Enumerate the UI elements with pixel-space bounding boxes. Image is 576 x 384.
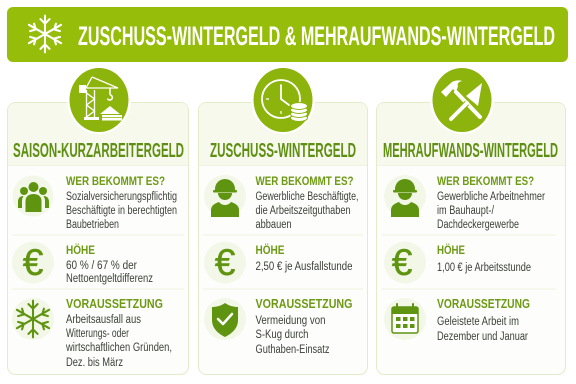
- row: wer bekommt es: WER BEKOMMT ES?: [437, 176, 534, 188]
- row: höhe: HÖHE: [256, 244, 285, 257]
- panel: Mehraufwands-Wintergeld: [376, 66, 566, 374]
- row: wer bekommt es: [384, 175, 545, 231]
- row: wer bekommt es: WER BEKOMMT ES?: [256, 176, 354, 188]
- row: höhe: HÖHE: [437, 244, 465, 257]
- row: wer bekommt es: Dachdeckergewerbe: [437, 219, 519, 231]
- row: voraussetzung: Arbeitsausfall aus: [66, 314, 141, 326]
- row: voraussetzung: [204, 297, 352, 356]
- row: höhe: 60 % / 67 % der: [66, 260, 137, 272]
- row: höhe: [384, 242, 531, 284]
- heading: SAISON-KURZARBEITERGELD: [13, 139, 184, 162]
- row: wer bekommt es: [12, 176, 177, 231]
- row: wer bekommt es: abbauen: [256, 219, 292, 231]
- row: höhe: Nettoentgeltdifferenz: [66, 273, 153, 285]
- icon: euro: [23, 242, 44, 283]
- row: wer bekommt es: Sozialversicherungspflichtig: [66, 191, 177, 203]
- row: höhe: [204, 242, 352, 284]
- row: wer bekommt es: Gewerbliche Arbeitnehmer: [437, 191, 545, 203]
- row: höhe: [12, 242, 153, 285]
- icon: worker: [391, 179, 419, 217]
- row: voraussetzung: wirtschaftlichen Gründen,: [65, 342, 172, 354]
- row: voraussetzung: Geleistete Arbeit im: [437, 316, 519, 328]
- row: voraussetzung: VORAUSSETZUNG: [256, 297, 352, 311]
- row: voraussetzung: Guthaben-Einsatz: [256, 344, 330, 356]
- icon: hammer and trowel: [430, 66, 494, 134]
- row: voraussetzung: Vermeidung von: [256, 315, 326, 327]
- icon: clock and coins: [251, 66, 315, 134]
- icon: snowflake: [17, 301, 49, 337]
- row: wer bekommt es: [204, 175, 358, 231]
- row: wer bekommt es: die Arbeitszeitguthaben: [256, 205, 350, 217]
- icon: shield: [212, 303, 238, 337]
- icon: calendar: [392, 304, 418, 333]
- icon: euro: [392, 242, 413, 283]
- row: voraussetzung: S-Kug durch: [256, 329, 308, 341]
- row: wer bekommt es: im Bauhaupt-/: [437, 205, 495, 217]
- icon: people: [12, 176, 54, 216]
- row: voraussetzung: Dez. bis März: [66, 357, 123, 369]
- row: höhe: 1,00 € je Arbeitsstunde: [437, 262, 531, 274]
- title banner: [7, 7, 568, 62]
- icon: euro: [215, 242, 236, 283]
- row: wer bekommt es: Baubetrieben: [66, 219, 119, 231]
- icon: worker: [211, 179, 239, 217]
- heading: ZUSCHUSS-WINTERGELD: [210, 139, 356, 162]
- row: voraussetzung: [12, 297, 172, 369]
- row: wer bekommt es: Beschäftigte in berechtigten: [66, 205, 177, 217]
- row: voraussetzung: VORAUSSETZUNG: [66, 297, 163, 311]
- row: voraussetzung: Witterungs- oder: [66, 328, 129, 340]
- row: voraussetzung: Dezember und Januar: [437, 331, 528, 343]
- panel: Zuschuss-Wintergeld: [198, 66, 368, 374]
- row: wer bekommt es: WER BEKOMMT ES?: [66, 176, 165, 188]
- row: voraussetzung: VORAUSSETZUNG: [437, 297, 530, 311]
- row: höhe: HÖHE: [66, 244, 95, 257]
- row: voraussetzung: [384, 297, 530, 343]
- icon: snowflake: [29, 16, 61, 52]
- panel: Saison-Kurzarbeitergeld: [8, 66, 188, 374]
- icon: crane: [67, 66, 131, 134]
- row: höhe: 2,50 € je Ausfallstunde: [256, 261, 352, 273]
- row: wer bekommt es: Gewerbliche Beschäftigte,: [256, 191, 358, 203]
